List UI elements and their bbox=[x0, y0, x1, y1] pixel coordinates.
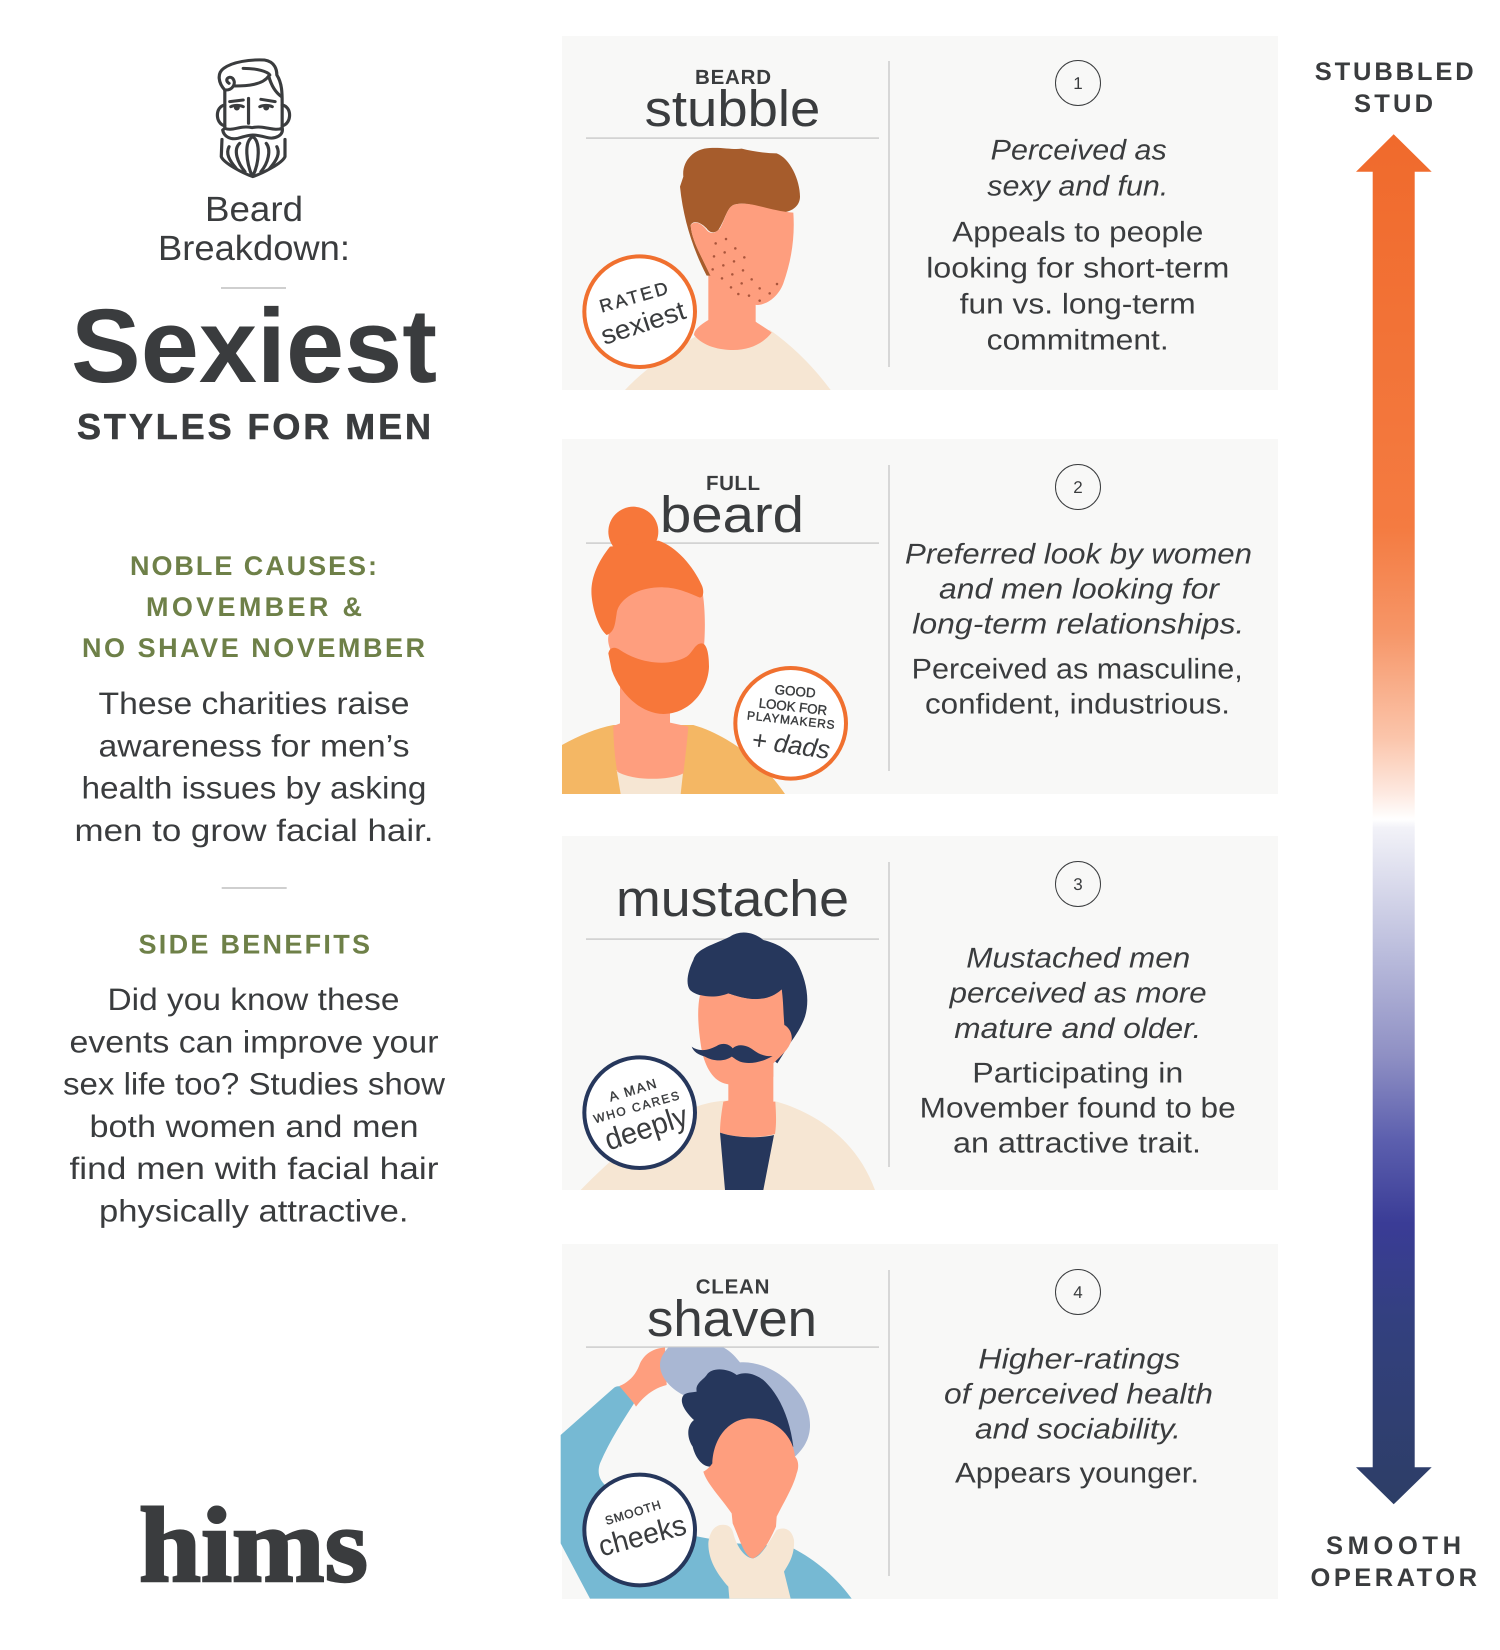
badge: good look for playmakers + dads: LOOK FOR bbox=[758, 696, 828, 718]
text block: side benefits: events can improve your bbox=[70, 1024, 438, 1059]
number 1 bbox=[1056, 60, 1100, 106]
number 1: 1 bbox=[1073, 74, 1083, 93]
badge: good look for playmakers + dads: + dads bbox=[750, 725, 832, 765]
label: smooth operator: SMOOTH bbox=[1326, 1532, 1461, 1560]
logo: hims: hims bbox=[139, 1487, 368, 1605]
description: stubble: Appeals to people bbox=[952, 216, 1203, 248]
text block: side benefits bbox=[63, 929, 446, 1228]
badge: a man who cares deeply: deeply bbox=[600, 1099, 692, 1157]
panel: clean shaven bbox=[561, 1244, 1278, 1599]
text block: side benefits: physically attractive. bbox=[99, 1194, 408, 1228]
heading: mustache: mustache bbox=[616, 870, 849, 927]
description: mustache: Participating in bbox=[972, 1057, 1183, 1089]
label: smooth operator: OPERATOR bbox=[1310, 1564, 1477, 1592]
heading: clean shaven: CLEAN bbox=[696, 1276, 769, 1299]
title: Breakdown: bbox=[158, 229, 350, 268]
number 3: 3 bbox=[1073, 875, 1083, 894]
text block: side benefits: find men with facial hair bbox=[70, 1151, 438, 1186]
description: mustache: mature and older. bbox=[954, 1013, 1201, 1045]
text block: side benefits: both women and men bbox=[90, 1109, 418, 1144]
number 4 bbox=[1056, 1270, 1100, 1314]
heading: beard stubble: BEARD bbox=[695, 66, 771, 89]
description: clean shaven bbox=[944, 1343, 1213, 1490]
text block: noble causes: MOVEMBER & bbox=[146, 592, 362, 622]
number 2 bbox=[1056, 464, 1100, 510]
description: full beard: confident, industrious. bbox=[925, 688, 1230, 720]
description: stubble: commitment. bbox=[987, 324, 1169, 356]
description: full beard: Perceived as masculine, bbox=[912, 653, 1243, 685]
number 4: 4 bbox=[1073, 1283, 1083, 1302]
title: Sexiest bbox=[71, 288, 437, 405]
description: full beard bbox=[905, 538, 1252, 720]
panel: full beard bbox=[562, 439, 1278, 794]
heading: full beard: beard bbox=[660, 486, 804, 543]
illustration: man with mustache bbox=[581, 933, 875, 1190]
badge: good look for playmakers + dads: GOOD bbox=[774, 682, 816, 701]
description: stubble: fun vs. long-term bbox=[960, 288, 1196, 320]
description: mustache: perceived as more bbox=[949, 978, 1207, 1010]
panel: mustache bbox=[562, 836, 1278, 1190]
description: full beard: long-term relationships. bbox=[912, 608, 1244, 640]
description: mustache: an attractive trait. bbox=[953, 1128, 1201, 1160]
heading: clean shaven: shaven bbox=[647, 1290, 817, 1347]
description: stubble bbox=[926, 134, 1229, 356]
text block: noble causes: health issues by asking bbox=[82, 770, 426, 806]
icon: bearded man bbox=[217, 60, 290, 177]
description: mustache bbox=[920, 942, 1236, 1160]
description: mustache: Movember found to be bbox=[920, 1093, 1236, 1125]
badge: a man who cares deeply bbox=[584, 1057, 695, 1168]
text block: side benefits: sex life too? Studies show bbox=[63, 1067, 446, 1102]
label: stubbled stud: STUD bbox=[1354, 90, 1433, 118]
text block: noble causes: men to grow facial hair. bbox=[74, 813, 434, 848]
panel: beard stubble bbox=[562, 36, 1278, 390]
badge: good look for playmakers + dads: PLAYMAKERS bbox=[746, 708, 835, 732]
description: clean shaven: Appears younger. bbox=[955, 1458, 1199, 1490]
badge: smooth cheeks: SMOOTH bbox=[603, 1498, 662, 1528]
text block: noble causes bbox=[74, 551, 434, 848]
label: smooth operator bbox=[1310, 1532, 1477, 1592]
arrow: gradient scale bbox=[1356, 134, 1432, 1504]
description: clean shaven: and sociability. bbox=[975, 1413, 1181, 1445]
description: mustache: Mustached men bbox=[966, 942, 1190, 974]
illustration: clean shaven man bbox=[561, 1347, 852, 1599]
description: full beard: Preferred look by women bbox=[905, 538, 1252, 570]
heading: beard stubble: stubble bbox=[645, 80, 820, 137]
text block: noble causes: NO SHAVE NOVEMBER bbox=[82, 633, 425, 663]
number 3 bbox=[1056, 862, 1100, 906]
heading: full beard: FULL bbox=[706, 472, 760, 495]
badge: good look for playmakers + dads bbox=[735, 668, 846, 779]
number 2: 2 bbox=[1073, 478, 1083, 497]
title bbox=[71, 190, 437, 447]
description: clean shaven: of perceived health bbox=[944, 1379, 1213, 1411]
badge: smooth cheeks: cheeks bbox=[595, 1508, 690, 1563]
description: full beard: and men looking for bbox=[939, 573, 1221, 605]
badge: rated sexiest bbox=[584, 256, 695, 367]
label: stubbled stud bbox=[1315, 58, 1474, 118]
badge: a man who cares deeply: A MAN bbox=[607, 1076, 658, 1105]
text block: side benefits: Did you know these bbox=[108, 982, 400, 1017]
label: stubbled stud: STUBBLED bbox=[1315, 58, 1474, 86]
text block: noble causes: These charities raise bbox=[98, 686, 410, 721]
title: Beard bbox=[205, 190, 303, 229]
illustration: man with full beard bbox=[562, 507, 785, 794]
description: stubble: looking for short-term bbox=[926, 252, 1229, 284]
text block: noble causes: awareness for men’s bbox=[98, 728, 410, 763]
description: stubble: sexy and fun. bbox=[987, 170, 1168, 202]
title: STYLES FOR MEN bbox=[77, 406, 431, 447]
badge: rated sexiest: RATED bbox=[597, 278, 670, 317]
description: stubble: Perceived as bbox=[991, 134, 1167, 166]
badge: rated sexiest: sexiest bbox=[597, 295, 689, 350]
badge: smooth cheeks bbox=[584, 1475, 695, 1585]
text block: side benefits: SIDE BENEFITS bbox=[138, 929, 370, 959]
description: clean shaven: Higher-ratings bbox=[978, 1343, 1180, 1375]
illustration: man with stubble bbox=[625, 148, 831, 390]
text block: noble causes: NOBLE CAUSES: bbox=[130, 551, 377, 581]
badge: a man who cares deeply: WHO CARES bbox=[592, 1088, 681, 1126]
